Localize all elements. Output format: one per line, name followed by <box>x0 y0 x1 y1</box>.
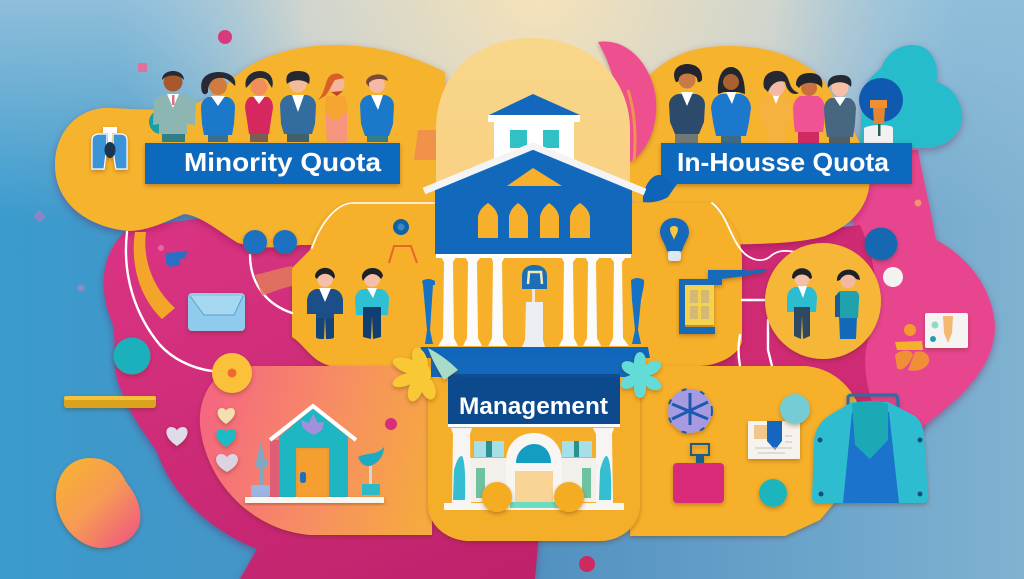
base <box>444 503 624 510</box>
people: circle pair <box>787 268 860 339</box>
people: middle pair left <box>307 268 389 339</box>
label: management: Management <box>459 393 608 420</box>
people: minority group <box>149 71 394 142</box>
person teal <box>355 268 389 339</box>
roof line <box>424 146 645 192</box>
icon: orange tag <box>414 130 436 160</box>
arch door <box>506 433 562 505</box>
person 3 <box>759 71 799 143</box>
panel: bottom centre yellow <box>428 360 640 541</box>
panel: magenta backdrop left <box>104 200 925 579</box>
centre sign <box>522 265 547 302</box>
white connecting lines <box>126 203 798 371</box>
panel: teal cloud <box>860 45 962 148</box>
house side <box>270 440 280 497</box>
planters <box>476 468 591 498</box>
white dot <box>883 267 903 287</box>
orange balls <box>482 482 512 512</box>
icon: hanging garment <box>92 127 127 169</box>
ball pale teal <box>780 394 810 424</box>
ball teal left <box>114 338 150 374</box>
panel: bottom left salmon <box>200 366 432 535</box>
panel: dark magenta behind circle <box>735 225 885 470</box>
label: minority quota: Minority Quota <box>184 147 382 177</box>
icon: light bulb <box>660 218 689 261</box>
person navy <box>307 268 343 339</box>
columns <box>451 428 614 503</box>
panel: central yellow <box>292 203 742 366</box>
panel: pink ear behind building <box>598 42 656 162</box>
people: in-house group <box>669 64 903 145</box>
panel: bottom right yellow <box>630 366 862 536</box>
side lamps <box>422 278 644 344</box>
panel: yellow cloud top left <box>55 45 445 247</box>
banner: management <box>448 377 620 424</box>
panel: yellow cloud top right <box>620 46 870 245</box>
house on shelf <box>245 406 384 503</box>
icon: envelope <box>188 293 245 331</box>
person 4 <box>280 71 316 142</box>
icon: id card <box>748 421 800 459</box>
blue ball right <box>864 228 898 260</box>
person 2 <box>201 72 235 142</box>
person blue skirt <box>835 270 860 339</box>
person 2 <box>711 67 751 143</box>
building: main <box>419 94 650 377</box>
icon: card right <box>925 313 968 348</box>
person 5 <box>318 74 348 142</box>
person 6: blue-headed figure <box>859 78 903 145</box>
person 3 <box>245 71 273 142</box>
windows <box>474 441 592 457</box>
ball teal <box>759 479 787 507</box>
panel: orange outline behind arch <box>628 90 635 162</box>
flower <box>301 414 324 435</box>
icons: hearts <box>166 408 238 472</box>
person 1 <box>149 71 196 142</box>
arched windows <box>478 203 590 238</box>
centre pedestal <box>522 302 545 347</box>
panel: cream arch <box>436 38 630 190</box>
panel: pink lobe right <box>842 150 995 472</box>
icon: purple medal <box>668 389 712 433</box>
beam <box>436 254 631 258</box>
banner: in-house quota <box>661 143 912 184</box>
person teal jacket <box>787 268 817 339</box>
tower windows <box>510 130 559 148</box>
banner: minority quota <box>145 143 400 184</box>
yellow arc band <box>134 232 175 319</box>
roof <box>270 406 356 440</box>
plant <box>358 447 384 495</box>
shape: blue tab by banner <box>643 175 677 202</box>
person 1 <box>669 64 705 143</box>
person 6 <box>360 74 394 142</box>
statue <box>251 441 270 497</box>
person 4 <box>793 73 825 143</box>
pediment window <box>507 168 562 186</box>
icon: tablet with arrow <box>679 269 767 334</box>
blob bottom left <box>56 458 140 548</box>
icon: blue ring <box>393 219 409 235</box>
platform <box>419 347 650 377</box>
building body <box>435 148 632 254</box>
icon: donut <box>212 353 252 393</box>
tower cornice <box>488 115 580 122</box>
flower: yellow <box>391 345 458 404</box>
building: small mansion <box>444 424 624 512</box>
panel: yellow circle <box>765 243 881 359</box>
wall detail <box>470 458 597 502</box>
icon: small blue tool <box>166 251 188 267</box>
house body <box>279 408 348 497</box>
flower: teal <box>618 352 664 398</box>
icon: orange compass <box>389 246 417 263</box>
door <box>296 448 329 497</box>
orange band <box>255 266 292 296</box>
label: in-house quota: In-Housse Quota <box>677 147 890 177</box>
icon: orange flower <box>895 324 929 371</box>
tower roof <box>489 94 580 115</box>
bar <box>64 396 156 408</box>
shelf <box>245 497 384 503</box>
icon: pink case <box>673 444 724 503</box>
person 5 <box>824 75 856 143</box>
columns <box>438 257 629 346</box>
icon: jacket <box>812 395 928 503</box>
blue balls <box>243 230 297 254</box>
tower <box>494 120 574 160</box>
